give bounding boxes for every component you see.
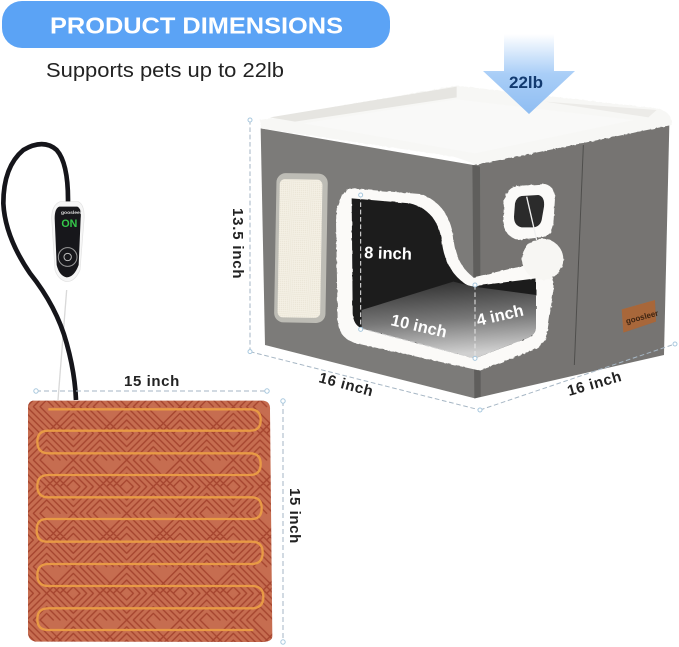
heading: product dimensions: PRODUCT DIMENSIONS <box>50 12 343 38</box>
scratch pad <box>274 173 328 323</box>
roof cushion <box>260 86 672 165</box>
label: house depth: 16 inch <box>317 369 375 400</box>
thin cord <box>58 290 67 400</box>
power cable <box>3 144 76 400</box>
main opening <box>336 188 554 371</box>
heating wire <box>37 409 263 630</box>
subheading: weight support: Supports pets up to 22lb <box>46 59 284 82</box>
label: pad height: 15 inch <box>286 488 303 544</box>
weight arrow <box>483 34 575 114</box>
controller: ON <box>61 218 77 230</box>
controller <box>52 202 84 282</box>
right face <box>473 125 669 398</box>
brand tag <box>622 300 659 333</box>
heating pad <box>28 401 272 642</box>
pad surface <box>28 401 272 642</box>
heating pad controller and cable <box>3 144 84 400</box>
label: opening width: 10 inch <box>389 311 449 342</box>
label: opening sill height: 4 inch <box>475 302 525 330</box>
brand tag: goosleer <box>625 309 659 326</box>
cat house <box>248 86 677 412</box>
dimension lines <box>250 120 675 410</box>
label: opening height: 8 inch <box>364 244 412 264</box>
label: house width: 16 inch <box>565 368 624 400</box>
arrow label: 22lb <box>509 73 543 92</box>
header pill <box>2 1 390 48</box>
left face <box>261 128 475 398</box>
label: house height: 13.5 inch <box>229 208 246 279</box>
pad dimension lines <box>34 389 285 644</box>
controller: goosleer <box>61 210 82 216</box>
label: pad width: 15 inch <box>124 373 180 390</box>
small window with toy <box>503 184 563 280</box>
